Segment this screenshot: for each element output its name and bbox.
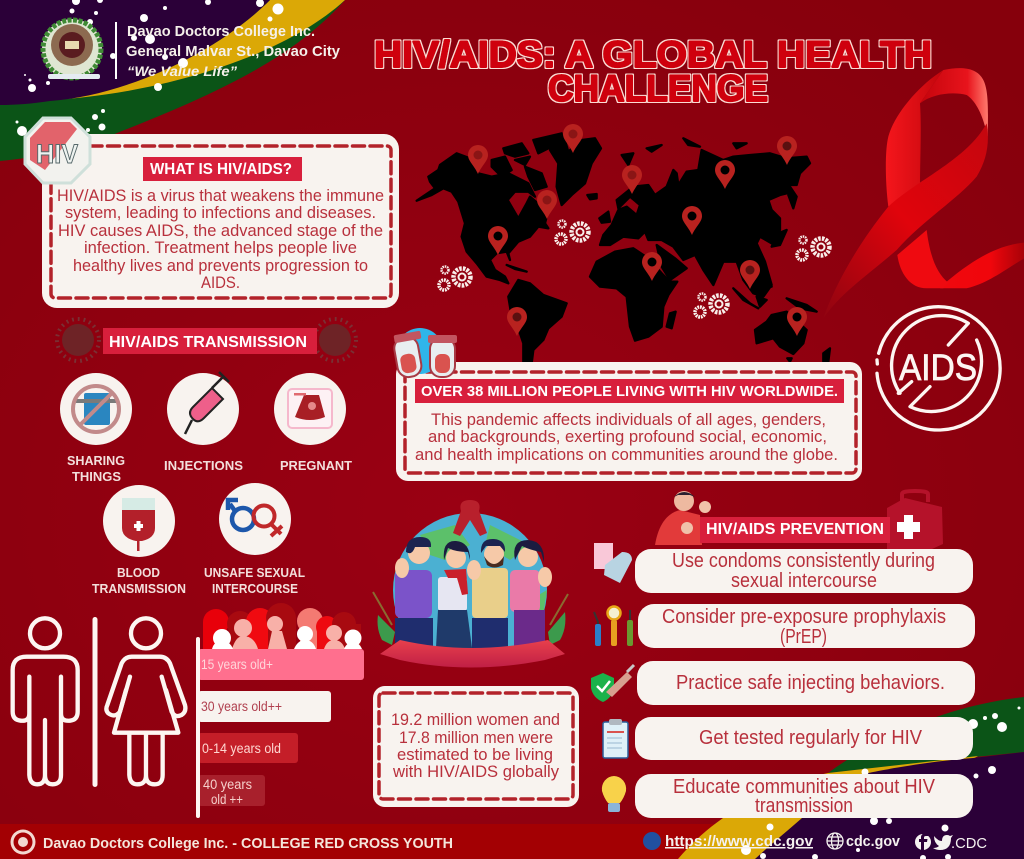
- chart axis: [196, 637, 200, 818]
- body text: pandemic impact: [415, 410, 838, 464]
- college logo: [42, 19, 102, 79]
- item: injections: INJECTIONS: [164, 458, 243, 473]
- footer: college red cross youth: Davao Doctors College Inc. - COLLEGE RED CROSS YOUTH: [43, 835, 453, 852]
- bottom-right decorative swoosh: [678, 697, 1024, 859]
- item: get tested: Get tested regularly for HIV: [699, 727, 923, 749]
- heading: what is HIV/AIDS: WHAT IS HIV/AIDS?: [150, 161, 292, 178]
- item: use condoms: sexual intercourse: [731, 570, 877, 592]
- item: sharing things: THINGS: [72, 469, 121, 484]
- bar: 30 years old++: [198, 691, 331, 722]
- red awareness ribbon: [823, 68, 1024, 318]
- heading: statistic: OVER 38 MILLION PEOPLE LIVING WITH HIV WORLDWIDE.: [421, 383, 838, 400]
- top-left decorative swoosh: [0, 0, 345, 161]
- panel: women and men statistic: with HIV/AIDS globally: [392, 762, 559, 781]
- crowd silhouettes: [203, 603, 362, 649]
- item: sharing things: [60, 373, 132, 484]
- item: pregnant: PREGNANT: [280, 458, 352, 473]
- body text: definition: HIV causes AIDS, the advanced stage of the: [58, 221, 383, 240]
- footer: college logo: [10, 830, 36, 854]
- body text: pandemic impact: This pandemic affects individuals of all ages, genders,: [431, 410, 826, 429]
- body text: definition: infection. Treatment helps people live: [84, 238, 357, 257]
- icon: facebook: [915, 834, 931, 850]
- globe: [393, 513, 547, 667]
- icon: shield and syringe: [591, 665, 634, 702]
- CDC handle: .CDC: [951, 835, 987, 852]
- icon: HIV stop sign: HIV: [36, 139, 78, 169]
- icon: twitter: [933, 835, 953, 850]
- panel: what is HIV/AIDS: [42, 134, 399, 308]
- bar: 40 years old ++: 40 years: [203, 777, 252, 792]
- item: injections: [164, 372, 243, 473]
- panel: women and men statistic: 19.2 million women and: [391, 710, 560, 729]
- footer bar: [0, 824, 1024, 859]
- item: blood transmission: TRANSMISSION: [92, 581, 186, 596]
- item: blood transmission: BLOOD: [117, 565, 160, 580]
- bar: 0-14 years old: [198, 733, 298, 763]
- body text: definition: HIV/AIDS is a virus that weakens the immune: [57, 186, 384, 205]
- icon: AIDS prohibited: AIDS: [899, 347, 977, 388]
- college name and motto: “We Value Life”: [127, 63, 237, 79]
- divider line: [115, 22, 117, 79]
- person 2: [436, 541, 472, 648]
- panel: transmission: [57, 319, 356, 596]
- icon: CDC badge: [643, 832, 661, 850]
- item: sharing things: SHARING: [67, 453, 125, 468]
- icon: clipboard: [603, 719, 628, 758]
- heading: prevention: HIV/AIDS PREVENTION: [706, 521, 884, 538]
- item: pregnant: [274, 373, 352, 473]
- continents: Old World: [590, 138, 830, 362]
- body text: pandemic impact: and backgrounds, exerting profound social, economic,: [428, 427, 827, 446]
- item: get tested: [635, 717, 973, 760]
- item: safe injecting: [637, 661, 975, 705]
- icon: man figure: [13, 618, 78, 784]
- item: PrEP: Consider pre-exposure prophylaxis: [662, 606, 946, 628]
- illustration: people with globe: [373, 500, 568, 668]
- website link: https://www.cdc.gov: [665, 833, 814, 850]
- heading: transmission: [103, 328, 317, 354]
- icon: HIV stop sign: [25, 118, 90, 183]
- college name and motto: [126, 23, 341, 79]
- panel: women and men statistic: estimated to be living: [397, 745, 553, 764]
- college name and motto: Davao Doctors College Inc.: [127, 23, 315, 40]
- body text: definition: healthy lives and prevents progression to: [73, 256, 368, 275]
- icon: first aid kit: [887, 491, 943, 549]
- item: use condoms: Use condoms consistently during: [672, 550, 935, 572]
- leaves: [373, 592, 568, 645]
- icon: light bulb: [602, 776, 626, 812]
- item: educate communities: Educate communities about HIV: [673, 776, 936, 798]
- website name: cdc.gov: [846, 833, 901, 850]
- icon: AIDS prohibited: [877, 307, 1000, 430]
- icon: medical tools: [594, 606, 633, 646]
- body text: definition: system, leading to infections and diseases.: [65, 203, 376, 222]
- item: use condoms: [635, 549, 973, 593]
- continents: Americas: [417, 133, 601, 363]
- person 4: [510, 540, 552, 646]
- college name and motto: General Malvar St., Davao City: [126, 43, 341, 60]
- icon: woman figure: [106, 618, 185, 784]
- bar chart: age groups: [196, 637, 364, 818]
- panel: women and men statistic: 17.8 million men were: [399, 728, 553, 747]
- icon: right virus: [314, 319, 356, 361]
- icon: left virus: [57, 319, 99, 361]
- item: unsafe sexual intercourse: INTERCOURSE: [212, 581, 298, 596]
- item: educate communities: transmission: [755, 795, 853, 817]
- item: unsafe sexual intercourse: UNSAFE SEXUAL: [204, 565, 305, 580]
- body text: definition: [57, 186, 384, 292]
- virus clusters on map: [439, 220, 830, 317]
- item: unsafe sexual intercourse: [204, 483, 305, 596]
- location pins: [468, 124, 807, 336]
- item: safe injecting: Practice safe injecting behaviors.: [676, 672, 945, 694]
- heading: what is HIV/AIDS: [143, 157, 302, 181]
- vertical divider between figures: [92, 617, 98, 787]
- title: CHALLENGE: [548, 68, 768, 109]
- panel: prevention: [591, 491, 975, 818]
- bar: 15 years old+: [198, 649, 364, 680]
- heading: prevention: [700, 517, 890, 543]
- awareness ribbon on globe: [453, 500, 487, 536]
- banner: [380, 640, 565, 668]
- title: [374, 34, 932, 109]
- item: blood transmission: [92, 485, 186, 596]
- bar: 0-14 years old: 0-14 years old: [202, 741, 281, 756]
- panel: women and men statistic: [373, 686, 579, 807]
- person 1: [395, 537, 433, 648]
- item: PrEP: [638, 604, 975, 648]
- bar: 40 years old ++: [198, 775, 265, 807]
- heading: statistic: [415, 379, 844, 403]
- bar: 15 years old+: 15 years old+: [201, 657, 273, 672]
- footer: CDC links: [643, 832, 987, 852]
- icon: test tubes: [393, 328, 457, 379]
- world map: [417, 124, 830, 363]
- panel: global statistic: [396, 362, 862, 481]
- bar: 30 years old++: 30 years old++: [201, 699, 282, 714]
- icon: globe: [827, 833, 843, 849]
- icon: man with raised hand: [655, 491, 711, 545]
- item: educate communities: [635, 774, 973, 818]
- person 3: [467, 539, 508, 648]
- bar: 40 years old ++: old ++: [211, 792, 243, 807]
- icon: condom packets: [594, 543, 632, 583]
- title: HIV/AIDS: A GLOBAL HEALTH: [374, 34, 932, 75]
- body text: definition: AIDS.: [201, 273, 240, 292]
- item: PrEP: (PrEP): [780, 626, 827, 648]
- heading: transmission: HIV/AIDS TRANSMISSION: [109, 334, 307, 351]
- body text: pandemic impact: and health implications on communities around the globe.: [415, 445, 838, 464]
